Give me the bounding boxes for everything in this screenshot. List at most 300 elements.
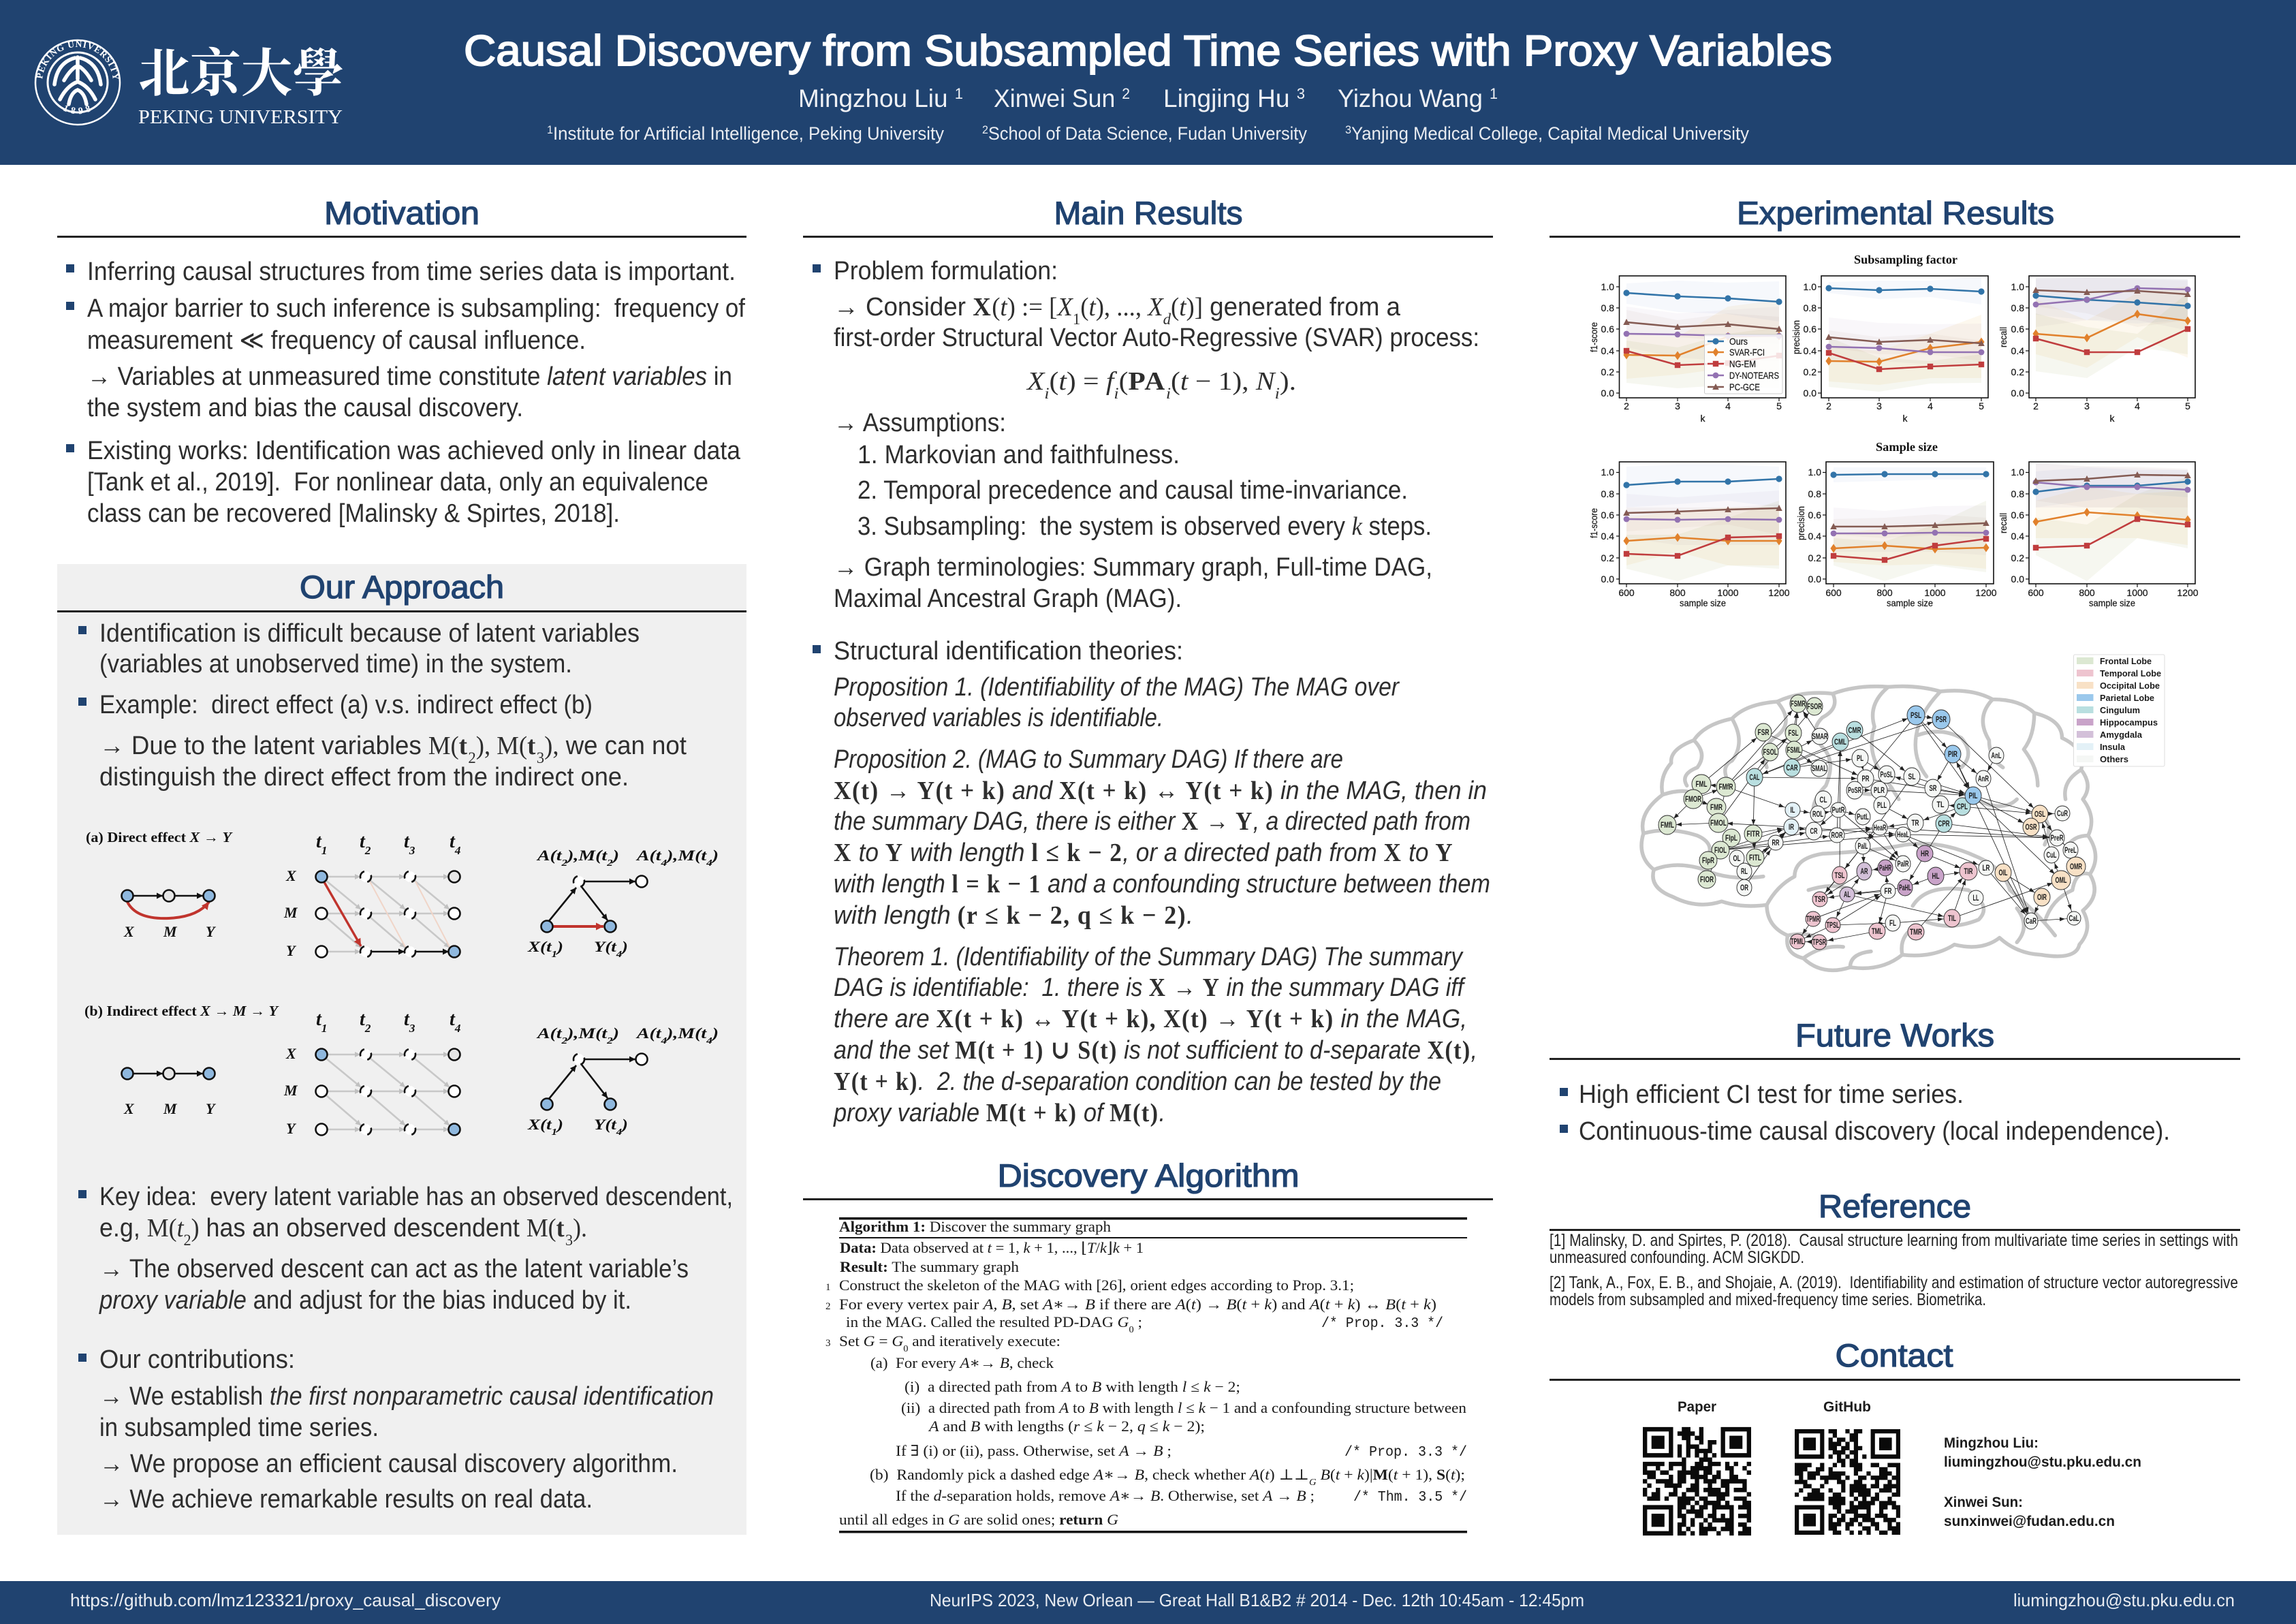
time grid: indirect effect: t1: [316, 1009, 327, 1034]
time grid: indirect effect: Y: [286, 1120, 297, 1137]
nodes: parietal lobe: PSL: [1910, 710, 1921, 720]
nodes: frontal lobe: FITL: [1749, 853, 1761, 862]
text block: problem formulation: → Assumptions:: [834, 409, 1006, 437]
bullets: motivation: [66, 264, 74, 452]
text block: contact emails: Mingzhou Liu:: [1944, 1435, 2039, 1451]
nodes: parietal lobe: PIR: [1948, 749, 1957, 759]
figure: indirect effect: [84, 1003, 719, 1137]
nodes: others: LL: [1972, 893, 1979, 903]
text block: key idea and contributions: → We propose an efficient causal discovery algorithm.: [99, 1450, 678, 1478]
text block: key idea and contributions: → The observed descent can act as the latent variable’s: [99, 1255, 689, 1283]
authors: Yizhou Wang: [1338, 84, 1485, 112]
chart: recall vs k: k: [2110, 413, 2116, 424]
text block: structural identification theories: and the set M(t + 1) ∪ S(t) is not sufficient to d-separate X(t),: [834, 1036, 1477, 1065]
nodes: occipital lobe: OIR: [2037, 892, 2047, 902]
time grid: indirect effect: [283, 1009, 461, 1137]
chart: f1-score vs k: f1-score: [1588, 322, 1599, 352]
nodes: others: PoSR: [1848, 785, 1861, 795]
MAG graph: indirect effect: X(t 1): [527, 1116, 563, 1136]
authors: 1: [955, 85, 963, 102]
chart: f1-score vs sample size: 0.8: [1601, 488, 1614, 499]
algorithm box: If the d-separation holds, remove A∗→ B. Otherwise, set A → B ;: [896, 1487, 1315, 1504]
nodes: frontal lobe: FMR: [1710, 802, 1723, 812]
nodes: temporal lobe: TMR: [1910, 927, 1922, 937]
algorithm box: A and B with lengths ( r ≤ k − 2, q ≤ k − 2);: [928, 1418, 1205, 1435]
chart: recall vs sample size: sample size: [2089, 597, 2135, 608]
time grid: indirect effect: t2: [360, 1009, 371, 1034]
panel: main results: [803, 195, 1493, 1127]
chart: recall vs sample size: 800: [2079, 587, 2095, 598]
chart: precision vs k: 0.6: [1804, 324, 1817, 334]
algorithm box: /* Prop. 3.3 */: [1321, 1316, 1443, 1332]
text block: motivation: Existing works: Identification was achieved only in linear data: [87, 437, 741, 465]
footer band: [0, 1581, 2296, 1624]
heading: discovery algorithm: Discovery Algorithm: [997, 1157, 1300, 1193]
footer: repository link: https://github.com/lmz123321/proxy_causal_discovery: [70, 1590, 501, 1610]
legend: brain regions: Occipital Lobe: [2100, 681, 2160, 691]
MAG graph: indirect effect: Y(t 4): [594, 1116, 628, 1136]
text block: future works: High efficient CI test for time series.: [1579, 1080, 1964, 1109]
text block: key idea and contributions: [99, 1183, 733, 1514]
logo: Peking University seal and wordmark: 1898: [63, 105, 91, 114]
nodes: others: CuR: [2057, 809, 2068, 818]
mini graph: direct effect: Y: [206, 923, 217, 940]
heading: contact: Contact: [1835, 1337, 1953, 1373]
chart: recall vs sample size: 0.0: [2011, 574, 2024, 584]
affiliations: 2: [982, 123, 988, 136]
chart: precision vs sample size: 1200: [1975, 587, 1997, 598]
nodes: hippocampus: HR: [1921, 849, 1929, 858]
time grid: direct effect: t4: [450, 831, 461, 857]
text block: key idea and contributions: Key idea: every latent variable has an observed descendent,: [99, 1183, 733, 1211]
time grid: direct effect: t3: [404, 831, 415, 857]
caption: direct effect: (a) Direct effect X → Y: [86, 829, 233, 845]
nodes: temporal lobe: [1790, 862, 1977, 950]
text block: identification and example: distinguish the direct effect from the indirect one.: [99, 763, 629, 792]
nodes: occipital lobe: OIL: [1998, 868, 2008, 877]
nodes: others: CL: [1820, 795, 1827, 805]
text block: key idea and contributions: Our contributions:: [99, 1345, 295, 1374]
nodes: cingulum: CMR: [1849, 725, 1861, 735]
nodes: cingulum: CML: [1834, 737, 1846, 747]
text block: motivation: measurement ≪ frequency of causal influence.: [87, 326, 586, 355]
chart: f1-score vs sample size: 0.0: [1601, 574, 1614, 584]
nodes: others: PalL: [1858, 841, 1868, 851]
nodes: hippocampus: PaHR: [1879, 863, 1891, 873]
affiliations: 3: [1345, 123, 1351, 136]
text block: structural identification theories: Proposition 1. (Identifiability of the MAG) The MAG over: [834, 673, 1400, 702]
algorithm box: 1: [825, 1282, 831, 1293]
chart: precision vs sample size: 1.0: [1808, 467, 1821, 478]
algorithm box: [825, 1217, 1467, 1533]
nodes: cingulum: [1746, 721, 1970, 832]
legend: SVAR-FCI: [1729, 347, 1765, 358]
nodes: others: RR: [1772, 838, 1780, 847]
nodes: others: FR: [1884, 886, 1892, 896]
text block: contact emails: [1944, 1435, 2141, 1529]
chart: f1-score vs k: 5: [1776, 401, 1782, 411]
chart: recall vs k: 2: [2033, 401, 2039, 411]
algorithm box: (i) a directed path from A to B with length l ≤ k − 2;: [905, 1378, 1240, 1395]
legend: brain regions: Insula: [2100, 742, 2126, 752]
MAG graph: indirect effect: A(t 4),M(t 4): [635, 1025, 719, 1045]
panel: experimental results: [1550, 195, 2240, 970]
authors: Xinwei Sun: [994, 84, 1120, 112]
chart: f1-score vs k: 0.2: [1601, 366, 1614, 377]
chart: recall vs k: 3: [2084, 401, 2090, 411]
title: Causal Discovery from Subsampled Time Series with Proxy Variables: [464, 27, 1832, 75]
chart: precision vs k: 0.2: [1804, 366, 1817, 377]
nodes: amygdala: [1840, 862, 1872, 902]
nodes: occipital lobe: OMR: [2070, 862, 2082, 871]
chart: f1-score vs sample size: sample size: [1680, 597, 1726, 608]
chart: recall vs sample size: 0.6: [2011, 510, 2024, 520]
chart: f1-score vs sample size: 0.2: [1601, 552, 1614, 563]
nodes: others: ROL: [1812, 809, 1823, 819]
MAG graph: direct effect: [527, 847, 719, 959]
nodes: frontal lobe: FSOL: [1763, 747, 1778, 757]
text block: key idea and contributions: in subsampled time series.: [99, 1414, 379, 1442]
text block: structural identification theories: observed variables is identifiable.: [834, 704, 1163, 732]
QR code: paper: Paper: [1678, 1399, 1716, 1415]
text block: structural identification theories: X to Y with length l ≤ k − 2, or a directed path from X to Y: [834, 839, 1453, 867]
chart: f1-score vs k: 2: [1624, 401, 1629, 411]
footer: venue and time: NeurIPS 2023, New Orlean — Great Hall B1&B2 # 2014 - Dec. 12th 10:45am - 12:45pm: [930, 1590, 1584, 1610]
time grid: indirect effect: X: [285, 1045, 297, 1062]
formula: SVAR process: Xi(t) = fi(PAi(t − 1), Ni).: [1026, 367, 1296, 403]
nodes: frontal lobe: FML: [1696, 779, 1707, 789]
legend: PC-GCE: [1729, 381, 1760, 392]
chart: f1-score vs k: [1588, 276, 1786, 424]
text block: key idea and contributions: → We achieve remarkable results on real data.: [99, 1485, 593, 1514]
algorithm box: (ii) a directed path from A to B with length l ≤ k − 1 and a confounding structure between: [901, 1399, 1466, 1416]
chart: f1-score vs k: 4: [1725, 401, 1731, 411]
nodes: amygdala: AR: [1861, 866, 1868, 876]
chart group title: subsampling factor: Subsampling factor: [1854, 253, 1957, 266]
chart: precision vs sample size: 1000: [1924, 587, 1946, 598]
affiliations: 1: [547, 123, 553, 136]
nodes: frontal lobe: FSOR: [1807, 702, 1822, 711]
mini graph: indirect effect: [121, 1068, 217, 1117]
chart: recall vs k: 0.6: [2011, 324, 2024, 334]
nodes: others: PR: [1862, 774, 1870, 783]
chart: recall vs sample size: 0.2: [2011, 552, 2024, 563]
nodes: others: CuL: [2046, 850, 2057, 860]
chart: f1-score vs k: k: [1700, 413, 1705, 424]
nodes: occipital lobe: OSL: [2034, 809, 2045, 819]
nodes: frontal lobe: FIOL: [1714, 845, 1727, 855]
algorithm box: If ∃ (i) or (ii), pass. Otherwise, set A → B ;: [896, 1442, 1171, 1459]
nodes: temporal lobe: TPML: [1791, 937, 1804, 946]
MAG graph: indirect effect: A(t 2),M(t 2): [535, 1025, 619, 1045]
mini graph: direct effect: M: [163, 923, 178, 940]
text block: problem formulation: [834, 257, 1479, 613]
chart: precision vs k: k: [1903, 413, 1908, 424]
time grid: indirect effect: t3: [404, 1009, 415, 1034]
chart: recall vs sample size: 600: [2028, 587, 2044, 598]
text block: problem formulation: Maximal Ancestral Graph (MAG).: [834, 584, 1182, 613]
text block: structural identification theories: with length (r ≤ k − 2, q ≤ k − 2).: [834, 901, 1193, 930]
text block: contact emails: liumingzhou@stu.pku.edu.cn: [1944, 1454, 2141, 1470]
logo: Peking University seal and wordmark: [34, 32, 344, 128]
nodes: others: PreL: [2064, 845, 2077, 855]
nodes: cingulum: CPR: [1938, 819, 1950, 828]
chart group title: sample size: Sample size: [1876, 440, 1938, 454]
nodes: temporal lobe: TPSL: [1827, 920, 1839, 930]
chart: recall vs k: 0.8: [2011, 302, 2024, 313]
chart: f1-score vs k: 1.0: [1601, 281, 1614, 292]
text block: motivation: the system and bias the causal discovery.: [87, 394, 523, 422]
chart: f1-score vs k: 0.0: [1601, 388, 1614, 399]
chart: precision vs k: precision: [1791, 320, 1802, 354]
chart: f1-score vs sample size: 800: [1669, 587, 1686, 598]
chart: recall vs k: 4: [2135, 401, 2140, 411]
mini graph: direct effect: [121, 890, 217, 940]
nodes: others: HeaR: [1873, 823, 1887, 832]
mini graph: indirect effect: M: [163, 1100, 178, 1117]
caption: indirect effect: (b) Indirect effect X → M → Y: [84, 1003, 279, 1019]
text block: future works: Continuous-time causal discovery (local independence).: [1579, 1117, 2170, 1146]
bullets: main results: [813, 264, 821, 653]
brain network diagram: [1641, 655, 2165, 970]
authors: [798, 84, 1498, 112]
text block: structural identification theories: proxy variable M(t + k) of M(t).: [833, 1099, 1165, 1127]
text block: motivation: A major barrier to such inference is subsampling: frequency of: [87, 294, 745, 323]
legend: Ours: [1729, 336, 1748, 347]
chart: f1-score vs k: 0.6: [1601, 324, 1614, 334]
chart: precision vs k: 0.8: [1804, 302, 1817, 313]
legend: NG-EM: [1729, 358, 1756, 369]
nodes: insula: IR: [1789, 822, 1794, 832]
nodes: frontal lobe: FITR: [1746, 829, 1760, 839]
nodes: frontal lobe: FIOR: [1700, 875, 1714, 884]
heading: experimental results: Experimental Results: [1737, 195, 2054, 231]
time grid: direct effect: Y: [286, 942, 297, 959]
header band: [0, 0, 2296, 165]
text block: structural identification theories: Theorem 1. (Identifiability of the Summary DAG) The summary: [834, 943, 1464, 971]
nodes: others: SL: [1908, 772, 1915, 781]
chart: recall vs sample size: 1200: [2177, 587, 2199, 598]
nodes: others: PL: [1857, 753, 1863, 763]
nodes: frontal lobe: FSMR: [1791, 699, 1806, 708]
text block: structural identification theories: Structural identification theories:: [834, 637, 1183, 666]
nodes: others: CR: [1810, 826, 1818, 836]
chart: recall vs k: 5: [2185, 401, 2190, 411]
text block: references: [1550, 1231, 2238, 1309]
nodes: temporal lobe: TPMR: [1806, 914, 1820, 924]
heading: our approach: Our Approach: [300, 569, 504, 605]
nodes: others: PalR: [1898, 859, 1909, 869]
legend: DY-NOTEARS: [1729, 370, 1779, 381]
text block: structural identification theories: X(t) → Y(t + k) and X(t + k) ↔ Y(t + k) in the MAG, then in: [834, 777, 1487, 805]
chart: recall vs sample size: 0.8: [2011, 488, 2024, 499]
nodes: temporal lobe: TML: [1872, 926, 1883, 936]
text block: structural identification theories: [833, 637, 1490, 1127]
chart: recall vs k: recall: [1998, 327, 2009, 347]
text block: references: unmeasured confounding. ACM SIGKDD.: [1550, 1248, 1804, 1267]
nodes: occipital lobe: OML: [2056, 875, 2066, 885]
algorithm box: Result: The summary graph: [840, 1258, 1019, 1275]
nodes: frontal lobe: FSL: [1789, 728, 1798, 738]
chart: recall vs k: 0.0: [2011, 388, 2024, 399]
chart: precision vs sample size: 0.8: [1808, 488, 1821, 499]
chart: f1-score vs sample size: 1200: [1768, 587, 1790, 598]
nodes: temporal lobe: TIR: [1964, 866, 1973, 876]
text block: references: models from subsampled and mixed-frequency time series. Biometrika.: [1550, 1290, 1986, 1309]
affiliations: School of Data Science, Fudan University: [988, 123, 1307, 144]
MAG graph: direct effect: Y(t 4): [594, 938, 628, 959]
brain outline: [1641, 686, 2096, 970]
text block: problem formulation: 3. Subsampling: the system is observed every k steps.: [858, 512, 1432, 541]
legend: brain regions: Frontal Lobe: [2100, 656, 2152, 666]
chart: precision vs sample size: [1795, 462, 1997, 608]
text block: motivation: [87, 257, 745, 528]
text block: motivation: → Variables at unmeasured time constitute latent variables in: [87, 362, 732, 391]
algorithm box: 3: [825, 1338, 831, 1349]
logo: Peking University seal and wordmark: PEKING UNIVERSITY: [37, 41, 119, 79]
nodes: frontal lobe: FIpL: [1725, 833, 1737, 843]
chart: precision vs sample size: 0.6: [1808, 510, 1821, 520]
chart: recall vs sample size: 0.4: [2011, 531, 2024, 542]
heading: reference: Reference: [1819, 1188, 1971, 1224]
chart: precision vs k: 0.0: [1804, 388, 1817, 399]
nodes: hippocampus: PaHL: [1899, 883, 1911, 892]
text block: identification and example: [99, 619, 687, 792]
text block: problem formulation: first-order Structural Vector Auto-Regressive (SVAR) process:: [834, 324, 1479, 352]
text block: structural identification theories: DAG is identifiable: 1. there is X → Y in the summary DAG iff: [834, 973, 1466, 1002]
algorithm box: (b) Randomly pick a dashed edge A∗→ B, check whether A(t) ⊥⊥ G B(t + k)|M(t + 1), S(t);: [870, 1466, 1465, 1486]
QR code: GitHub: GitHub: [1823, 1399, 1871, 1415]
chart: precision vs sample size: 600: [1825, 587, 1842, 598]
nodes: temporal lobe: TPSR: [1812, 937, 1826, 947]
chart: precision vs sample size: 0.4: [1808, 531, 1821, 542]
nodes: occipital lobe: [1995, 805, 2086, 906]
chart: recall vs k: 0.2: [2011, 366, 2024, 377]
nodes: frontal lobe: FMfR: [1719, 782, 1733, 792]
chart: recall vs sample size: [1998, 462, 2199, 608]
nodes: insula: IL: [1790, 805, 1795, 815]
nodes: hippocampus: [1878, 845, 1944, 896]
chart: recall vs sample size: recall: [1998, 513, 2009, 533]
panel: future works: [1550, 1017, 2240, 1146]
panel: contact: [1550, 1337, 2240, 1533]
text block: key idea and contributions: e.g, M(t2) has an observed descendent M(t3).: [99, 1214, 587, 1249]
logo: Peking University seal and wordmark: 北京大學: [138, 32, 344, 106]
text block: problem formulation: 1. Markovian and faithfulness.: [858, 441, 1180, 469]
QR code: paper: [1643, 1399, 1751, 1533]
chart: f1-score vs sample size: 0.6: [1601, 510, 1614, 520]
mini graph: indirect effect: X: [123, 1100, 135, 1117]
nodes: others: FL: [1889, 918, 1896, 928]
nodes: others: SR: [1929, 783, 1937, 793]
algorithm box: in the MAG. Called the resulted PD-DAG G0 ;: [846, 1313, 1142, 1334]
causal edges: [1667, 704, 2074, 942]
legend: brain regions: Temporal Lobe: [2100, 668, 2161, 678]
nodes: others: PLR: [1874, 785, 1885, 795]
algorithm box: Algorithm 1: Discover the summary graph: [839, 1218, 1111, 1235]
chart: precision vs k: [1791, 276, 1988, 424]
nodes: frontal lobe: FSR: [1757, 728, 1770, 737]
nodes: others: ROR: [1831, 830, 1843, 840]
nodes: cingulum: CAL: [1749, 772, 1760, 782]
nodes: others: CaL: [2069, 914, 2079, 923]
algorithm box: 2: [825, 1301, 831, 1312]
chart: precision vs sample size: precision: [1795, 506, 1806, 540]
time grid: indirect effect: M: [283, 1082, 298, 1099]
chart: precision vs k: 2: [1826, 401, 1831, 411]
algorithm box: until all edges in G are solid ones; return G: [839, 1511, 1118, 1528]
panel: our approach: [57, 564, 746, 1535]
algorithm box: Set G = G0 and iteratively execute:: [839, 1332, 1060, 1353]
text block: key idea and contributions: proxy variable and adjust for the bias induced by it.: [99, 1286, 631, 1315]
algorithm box: For every vertex pair A, B, set A∗→ B if there are A(t) → B(t + k) and A(t + k) ↔ B(t + k): [839, 1296, 1436, 1313]
authors: Mingzhou Liu: [798, 84, 948, 112]
nodes: others: PutL: [1857, 812, 1869, 822]
chart: f1-score vs k: 0.4: [1601, 345, 1614, 356]
nodes: cingulum: CAR: [1786, 763, 1798, 772]
time grid: direct effect: t2: [360, 831, 371, 857]
authors: 1: [1490, 85, 1498, 102]
chart: f1-score vs k: 0.8: [1601, 302, 1614, 313]
time grid: direct effect: [283, 831, 461, 959]
nodes: frontal lobe: FMOR: [1685, 794, 1701, 804]
nodes: others: [1729, 728, 2081, 931]
authors: 3: [1297, 85, 1305, 102]
heading: motivation: Motivation: [324, 195, 479, 231]
nodes: frontal lobe: [1658, 695, 1823, 888]
legend: brain regions: Amygdala: [2100, 730, 2143, 740]
nodes: insula: [1784, 802, 1800, 835]
heading: future works: Future Works: [1795, 1017, 1994, 1053]
affiliations: Yanjing Medical College, Capital Medical University: [1351, 123, 1749, 144]
authors: 2: [1122, 85, 1130, 102]
nodes: frontal lobe: FIpR: [1702, 856, 1714, 865]
authors: Lingjing Hu: [1163, 84, 1289, 112]
legend: brain regions: Hippocampus: [2100, 717, 2158, 728]
text block: structural identification theories: Y(t + k). 2. the d-separation condition can be tested by the: [834, 1067, 1441, 1096]
nodes: hippocampus: HL: [1932, 871, 1940, 881]
text block: problem formulation: Problem formulation:: [834, 257, 1058, 285]
algorithm box: (a) For every A∗→ B, check: [870, 1354, 1054, 1371]
chart: precision vs k: 5: [1979, 401, 1984, 411]
chart: f1-score vs sample size: 1.0: [1601, 467, 1614, 478]
panel: reference: [1550, 1188, 2240, 1309]
nodes: others: HeaL: [1897, 830, 1909, 839]
panel: motivation: [57, 195, 746, 528]
footer: email: liumingzhou@stu.pku.edu.cn: [2013, 1590, 2235, 1610]
nodes: others: OR: [1740, 883, 1748, 892]
chart: precision vs sample size: 800: [1876, 587, 1893, 598]
chart: recall vs k: 0.4: [2011, 345, 2024, 356]
text block: problem formulation: → Consider X(t) := [X1(t), ..., Xd(t)] generated from a: [834, 293, 1401, 328]
chart: f1-score vs sample size: f1-score: [1588, 508, 1599, 538]
bullets: future works: [1560, 1088, 1568, 1133]
chart: f1-score vs sample size: 600: [1618, 587, 1635, 598]
text block: contact emails: Xinwei Sun:: [1944, 1495, 2023, 1510]
nodes: frontal lobe: FMOL: [1710, 818, 1727, 828]
QR code: GitHub: [1795, 1399, 1900, 1533]
nodes: cingulum: CPL: [1957, 802, 1968, 811]
chart: recall vs k: 1.0: [2011, 281, 2024, 292]
MAG graph: direct effect: A(t 2),M(t 2): [535, 847, 619, 868]
nodes: temporal lobe: TSL: [1835, 871, 1844, 880]
chart: recall vs sample size: 1.0: [2011, 467, 2024, 478]
text block: structural identification theories: with length l = k − 1 and a confounding structure between them: [834, 870, 1490, 899]
heading: main results: Main Results: [1054, 195, 1242, 231]
nodes: temporal lobe: TSR: [1814, 894, 1825, 904]
chart: f1-score vs sample size: 0.4: [1601, 531, 1614, 542]
time grid: direct effect: X: [285, 867, 297, 884]
